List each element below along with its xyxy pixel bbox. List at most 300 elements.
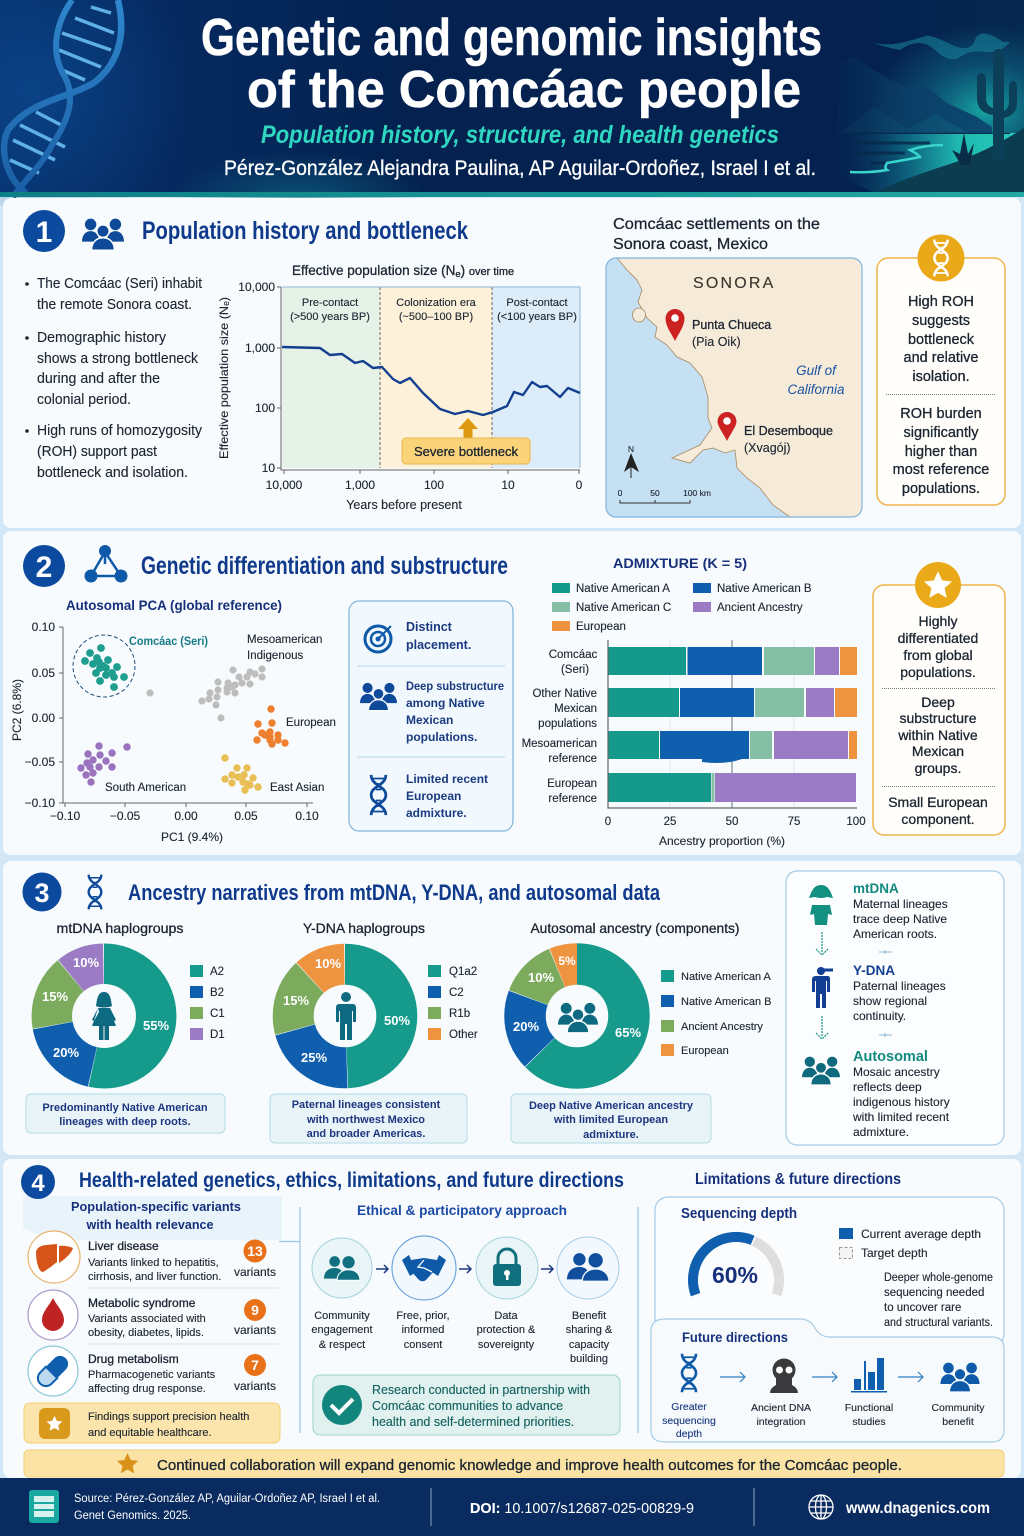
bullet list: The Comcáac (Seri) inhabit xyxy=(37,276,202,292)
legend: admixture: European xyxy=(576,621,626,633)
text: metabolic syndrome xyxy=(88,1296,206,1339)
line chart: effective population size: (<100 years BP) xyxy=(497,311,577,323)
bullet list xyxy=(25,276,203,481)
callout: partnership: health and self-determined priorities. xyxy=(372,1415,574,1429)
labels: future steps: Greater xyxy=(671,1401,707,1413)
labels: future steps: integration xyxy=(756,1416,806,1428)
panel 3: ancestry narratives: 10% xyxy=(528,970,554,985)
icon: blood drop xyxy=(28,1290,78,1340)
scatter plot: PCA: 0.05 xyxy=(234,809,258,823)
icon: people xyxy=(360,683,397,711)
caption: autosomal xyxy=(511,1094,711,1143)
text: mtDNA: mtDNA xyxy=(853,881,899,896)
stacked bar chart: admixture: populations xyxy=(538,718,597,730)
text: deeper sequencing: to uncover rare xyxy=(884,1302,961,1314)
scatter plot: PCA: Comcáac (Seri) xyxy=(129,634,208,648)
text: mtDNA xyxy=(853,881,948,941)
badge: 7 variants: variants xyxy=(234,1379,276,1393)
text: autosomal: with limited recent xyxy=(852,1110,950,1124)
callout: precision health: Findings support precision health xyxy=(88,1411,249,1423)
stacked bar chart: admixture: Comcáac xyxy=(549,649,598,661)
step: benefit sharing: sharing & xyxy=(566,1324,613,1336)
scale bar xyxy=(618,488,711,503)
text: Y-DNA: show regional xyxy=(853,994,927,1008)
panel 3: ancestry narratives: 20% xyxy=(513,1019,539,1034)
donut chart: mtDNA xyxy=(52,964,156,1068)
donut title: autosomal: Autosomal ancestry (components) xyxy=(530,920,740,936)
line chart: effective population size: Effective population size (N xyxy=(292,263,455,278)
bullet list: Demographic history xyxy=(37,330,167,346)
callout: severe bottleneck: Severe bottleneck xyxy=(414,444,519,459)
scatter plot: PCA: PC1 (9.4%) xyxy=(161,830,223,844)
text: deeper sequencing xyxy=(884,1272,993,1329)
bullet list: the remote Sonora coast. xyxy=(37,297,192,313)
heading: ethical approach: Ethical & participatory approach xyxy=(357,1202,567,1218)
line chart: effective population size: 100 xyxy=(255,401,275,415)
stacked bar chart: admixture xyxy=(522,640,866,848)
text: autosomal: Mosaic ancestry xyxy=(853,1065,940,1079)
callout card: ROH: populations. xyxy=(902,481,980,497)
section number 4: 4 xyxy=(31,1170,45,1197)
stacked bar chart: admixture: 50 xyxy=(726,816,738,828)
legend: depth: Current average depth xyxy=(861,1227,981,1241)
text: distinct placement: placement. xyxy=(406,638,471,652)
section number 1 xyxy=(23,210,65,252)
website: www.dnagenics.com xyxy=(845,1500,990,1517)
caption: Y-DNA: and broader Americas. xyxy=(307,1128,425,1140)
card: narratives xyxy=(786,871,1004,1145)
text: distinct placement xyxy=(406,620,471,652)
step: benefit sharing: capacity xyxy=(569,1339,610,1351)
legend: mtDNA: D1 xyxy=(210,1029,225,1041)
scale bar: 100 km xyxy=(683,488,711,498)
bullet list: during and after the xyxy=(37,371,160,387)
card: sequencing depth xyxy=(655,1197,1004,1347)
panel 3: ancestry narratives: 55% xyxy=(143,1018,169,1033)
donut chart: autosomal xyxy=(525,964,629,1068)
icon: DNA xyxy=(371,775,386,815)
arrow: bottleneck xyxy=(458,418,478,439)
gauge: 60 percent: 60% xyxy=(712,1262,758,1288)
text: drug metabolism: Drug metabolism xyxy=(88,1352,179,1366)
text: Y-DNA: Y-DNA xyxy=(853,963,895,978)
text: limited admixture: Limited recent xyxy=(406,772,488,786)
map heading xyxy=(613,216,820,253)
scatter plot: PCA: −0.10 xyxy=(50,809,81,823)
labels: future steps: studies xyxy=(852,1416,886,1428)
arrow: Y-DNA to autosomal xyxy=(816,1016,828,1039)
legend: depth: Target depth xyxy=(861,1246,928,1260)
labels: future steps: benefit xyxy=(942,1416,974,1428)
step: benefit sharing: building xyxy=(570,1353,608,1365)
title xyxy=(201,9,822,119)
text: deeper sequencing: Deeper whole-genome xyxy=(884,1272,993,1284)
callout card: differentiated: groups. xyxy=(915,760,961,776)
labels: future steps: sequencing xyxy=(662,1415,716,1427)
callout card: ROH: High ROH xyxy=(908,294,974,310)
bullet list: shows a strong bottleneck xyxy=(37,351,199,367)
text: limited admixture: European xyxy=(406,789,461,803)
caption: Y-DNA: with northwest Mexico xyxy=(306,1114,425,1126)
title: of the Comcáac people xyxy=(247,61,801,119)
bullet list: High runs of homozygosity xyxy=(37,423,203,439)
callout card: ROH: bottleneck xyxy=(908,332,975,348)
line chart: effective population size: Post-contact xyxy=(506,297,568,309)
callout card: ROH: most reference xyxy=(893,462,989,478)
step: data protection: protection & xyxy=(477,1324,536,1336)
subheading: variants: with health relevance xyxy=(86,1217,214,1232)
legend: admixture: Native American C xyxy=(576,602,671,614)
callout: partnership xyxy=(313,1375,620,1435)
stacked bar chart: admixture: 25 xyxy=(664,816,676,828)
text: autosomal: indigenous history xyxy=(853,1095,950,1109)
line chart: effective population size: (~500–100 BP) xyxy=(399,311,473,323)
legend: admixture: Native American B xyxy=(717,583,812,595)
gauge: 60 percent xyxy=(693,1237,779,1295)
legend: Y-DNA xyxy=(428,965,478,1041)
line chart: effective population size: over time xyxy=(469,266,514,278)
line chart: effective population size: 1,000 xyxy=(345,478,375,492)
text: deeper sequencing: sequencing needed xyxy=(884,1287,984,1299)
text: mtDNA: trace deep Native xyxy=(853,912,947,926)
banner: closing message xyxy=(24,1450,1004,1477)
line chart: effective population size: 10 xyxy=(262,461,275,475)
step: community engagement: Community xyxy=(314,1310,370,1322)
arrow xyxy=(459,1265,471,1273)
step: informed consent: Free, prior, xyxy=(396,1310,450,1322)
caption: Y-DNA: Paternal lineages consistent xyxy=(292,1099,441,1111)
card: key findings xyxy=(349,601,513,831)
line chart: effective population size: 100 xyxy=(424,478,444,492)
legend: Y-DNA: Q1a2 xyxy=(449,966,477,978)
bullet list: bottleneck and isolation. xyxy=(37,465,188,481)
icon: girl xyxy=(809,885,833,925)
callout card: ROH: suggests xyxy=(912,313,970,329)
callout card: differentiated: Mexican xyxy=(912,743,964,759)
heading 2: Genetic differentiation and substructure xyxy=(141,552,508,580)
scale bar: 0 xyxy=(618,488,623,498)
stacked bar chart: admixture: (Seri) xyxy=(561,664,589,676)
donut title: mtDNA: mtDNA haplogroups xyxy=(56,920,184,936)
callout card: differentiated: component. xyxy=(901,811,975,827)
icon: man xyxy=(336,992,356,1040)
section number 3 xyxy=(22,872,62,912)
line chart: effective population size: 1,000 xyxy=(245,341,275,355)
stacked bar chart: admixture: Mexican xyxy=(554,703,597,715)
text: liver disease: cirrhosis, and liver function. xyxy=(88,1271,221,1283)
subheading: variants xyxy=(71,1199,241,1232)
text: limited admixture: admixture. xyxy=(406,806,467,820)
scatter plot: PCA: −0.05 xyxy=(25,755,55,769)
text: drug metabolism xyxy=(88,1352,216,1395)
PCA title: Autosomal PCA (global reference) xyxy=(66,597,282,613)
text: deep substructure: Mexican xyxy=(406,713,453,727)
icon: family group xyxy=(802,1057,840,1085)
callout card: differentiated: from global xyxy=(903,647,973,663)
stacked bar chart: admixture: Mesoamerican xyxy=(522,738,597,750)
source text: Source: Pérez-González AP, Aguilar-Ordoñez AP, Israel I et al. xyxy=(74,1493,380,1505)
icon: target xyxy=(365,626,391,652)
legend: mtDNA: B2 xyxy=(210,987,224,999)
line chart: effective population size xyxy=(217,263,583,512)
source text: Genet Genomics. 2025. xyxy=(74,1510,191,1522)
stacked bar chart: admixture: 75 xyxy=(788,816,800,828)
labels: future steps: depth xyxy=(676,1428,702,1440)
scatter plot: PCA: European xyxy=(286,717,336,729)
callout: precision health: and equitable healthcare. xyxy=(88,1427,212,1439)
callout card: differentiated: Highly xyxy=(919,613,957,629)
legend: mtDNA xyxy=(190,965,225,1041)
badge: 9 variants xyxy=(234,1299,276,1337)
map: Sonora coast xyxy=(606,258,862,517)
arrow xyxy=(541,1265,553,1273)
line chart: effective population size: 10,000 xyxy=(238,280,275,294)
text: metabolic syndrome: obesity, diabetes, lipids. xyxy=(88,1327,204,1339)
heading 3: Ancestry narratives from mtDNA, Y-DNA, and autosomal data xyxy=(128,880,661,905)
label Punta Chueca: Punta Chueca xyxy=(692,318,771,332)
callout card: differentiated: Deep xyxy=(921,694,955,710)
scatter plot: PCA: 0.00 xyxy=(32,711,55,725)
callout card: differentiated: differentiated xyxy=(898,630,978,646)
legend: Y-DNA: Other xyxy=(449,1029,478,1041)
map heading: Sonora coast, Mexico xyxy=(613,236,768,253)
badge: 7 variants: 7 xyxy=(251,1357,259,1373)
footer xyxy=(0,1478,1024,1536)
icon: paper xyxy=(29,1490,59,1523)
text: liver disease xyxy=(88,1239,221,1283)
badge: 9 variants: 9 xyxy=(251,1302,259,1318)
icon: globe xyxy=(809,1495,833,1519)
line chart: effective population size: Pre-contact xyxy=(302,297,358,309)
panel 3: ancestry narratives: 20% xyxy=(53,1045,79,1060)
arrow xyxy=(898,1372,923,1382)
scatter plot: PCA: 0.05 xyxy=(32,666,55,680)
scatter plot: PCA xyxy=(10,620,336,844)
callout: precision health xyxy=(24,1403,280,1443)
legend: admixture: Native American A xyxy=(576,583,670,595)
text: distinct placement: Distinct xyxy=(406,620,453,634)
callout: partnership: Comcáac communities to advance xyxy=(372,1399,563,1413)
scatter plot: PCA: −0.05 xyxy=(110,809,141,823)
label Punta Chueca xyxy=(692,318,771,349)
caption: mtDNA xyxy=(26,1094,225,1133)
text: deeper sequencing: and structural variants. xyxy=(884,1317,993,1329)
icon: man xyxy=(812,967,833,1008)
label El Desemboque xyxy=(744,424,833,455)
callout card: differentiated: Small European xyxy=(888,794,988,810)
scatter plot: PCA: Indigenous xyxy=(247,650,304,662)
labels: future steps xyxy=(662,1401,985,1440)
north arrow xyxy=(624,444,639,478)
callout card: differentiated: populations. xyxy=(900,664,976,680)
text: mtDNA: Maternal lineages xyxy=(853,897,948,911)
donut chart: Y-DNA xyxy=(293,964,397,1068)
callout card: ROH: and relative xyxy=(904,350,978,366)
step: data protection xyxy=(476,1237,538,1351)
callout card: differentiated: substructure xyxy=(899,710,977,726)
callout card: ROH: isolation. xyxy=(912,369,970,385)
arrow: mtDNA to Y-DNA xyxy=(816,932,828,955)
card: sequencing depth: Sequencing depth xyxy=(681,1206,797,1222)
panel 3: ancestry narratives: 25% xyxy=(301,1050,327,1065)
icon: DNA xyxy=(682,1354,696,1392)
subheading: variants: Population-specific variants xyxy=(71,1199,241,1214)
callout card: ROH xyxy=(877,234,1005,505)
scatter plot: PCA: 0.00 xyxy=(174,809,198,823)
badge: 13 variants xyxy=(234,1240,276,1279)
scatter plot: PCA: Mesoamerican xyxy=(247,634,322,646)
icon: map pin Punta Chueca xyxy=(666,309,684,341)
legend: admixture xyxy=(552,583,812,633)
text: drug metabolism: affecting drug response. xyxy=(88,1383,206,1395)
badge: 13 variants: variants xyxy=(234,1265,276,1279)
badge: 9 variants: variants xyxy=(234,1323,276,1337)
stacked bar chart: admixture: 100 xyxy=(846,816,866,828)
heading 4: Health-related genetics, ethics, limitations, and future directions xyxy=(79,1169,624,1192)
label Gulf of California: California xyxy=(787,382,845,397)
heading 1: Population history and bottleneck xyxy=(142,217,468,245)
text: metabolic syndrome: Variants associated with xyxy=(88,1313,206,1325)
text: Y-DNA: Paternal lineages xyxy=(853,979,946,993)
legend: autosomal: Ancient Ancestry xyxy=(681,1021,763,1033)
icon: skull xyxy=(770,1358,798,1393)
text: Y-DNA xyxy=(853,963,946,1023)
step: informed consent: informed xyxy=(402,1324,444,1336)
authors: Pérez-González Alejandra Paulina, AP Aguilar-Ordoñez, Israel I et al. xyxy=(224,157,816,180)
stacked bar chart: admixture: reference xyxy=(548,753,597,765)
callout card: ROH: ROH burden xyxy=(900,406,982,422)
badge: 13 variants: 13 xyxy=(247,1243,263,1259)
north arrow: N xyxy=(628,444,634,454)
step: informed consent xyxy=(392,1236,456,1351)
callout card: differentiated: within Native xyxy=(897,727,978,743)
scatter plot: PCA: 0.10 xyxy=(295,809,319,823)
icon: molecule xyxy=(84,545,128,582)
section number 2: 2 xyxy=(36,551,52,584)
panel 3: ancestry narratives: 65% xyxy=(615,1025,641,1040)
callout card: ROH: higher than xyxy=(905,444,977,460)
text: deep substructure: Deep substructure xyxy=(406,679,504,693)
text: autosomal xyxy=(852,1049,950,1139)
stacked bar chart: admixture: Ancestry proportion (%) xyxy=(659,834,785,848)
caption: autosomal: Deep Native American ancestry xyxy=(529,1100,694,1112)
label El Desemboque: El Desemboque xyxy=(744,424,833,438)
badge: 7 variants xyxy=(234,1354,276,1393)
label Gulf of California xyxy=(787,363,845,397)
map heading: Comcáac settlements on the xyxy=(613,216,820,233)
panel 2: differentiation xyxy=(3,531,1021,855)
text: metabolic syndrome: Metabolic syndrome xyxy=(88,1296,196,1310)
labels: future steps: Ancient DNA xyxy=(751,1402,811,1414)
text: Y-DNA: continuity. xyxy=(853,1009,906,1023)
legend: autosomal xyxy=(661,970,772,1057)
scatter plot: PCA: South American xyxy=(105,782,186,794)
legend: Y-DNA: C2 xyxy=(449,987,464,999)
section number 3: 3 xyxy=(34,878,50,908)
panel 3: ancestry narratives: 10% xyxy=(73,955,99,970)
stacked bar chart: admixture: 0 xyxy=(605,816,611,828)
legend: Y-DNA: R1b xyxy=(449,1008,470,1020)
line chart: effective population size: 0 xyxy=(576,478,583,492)
legend: autosomal: Native American A xyxy=(681,971,772,983)
caption: mtDNA: lineages with deep roots. xyxy=(59,1116,191,1128)
legend: autosomal: European xyxy=(681,1045,729,1057)
text: liver disease: Variants linked to hepatitis, xyxy=(88,1257,219,1269)
stacked bar chart: admixture: Other Native xyxy=(532,688,597,700)
caption: autosomal: with limited European xyxy=(553,1114,668,1126)
panel 3: ancestry narratives: 50% xyxy=(384,1013,410,1028)
text: deep substructure: populations. xyxy=(406,730,477,744)
scatter plot: PCA: 0.10 xyxy=(32,620,55,634)
caption: autosomal: admixture. xyxy=(583,1129,639,1141)
scatter plot: PCA: East Asian xyxy=(270,782,324,794)
bullet list: colonial period. xyxy=(37,392,131,408)
text: autosomal: reflects deep xyxy=(853,1080,922,1094)
DNA helix illustration xyxy=(4,0,121,197)
legend: mtDNA: A2 xyxy=(210,966,224,978)
callout: partnership: Research conducted in partnership with xyxy=(372,1383,590,1397)
panel 3: ancestry narratives xyxy=(3,861,1021,1155)
map: Sonora coast: SONORA xyxy=(693,275,776,292)
text: mtDNA: American roots. xyxy=(853,927,937,941)
panel 3: ancestry narratives: 5% xyxy=(558,954,576,968)
line chart: effective population size: 10 xyxy=(501,478,515,492)
arrow xyxy=(720,1372,745,1382)
DOI: DOI: 10.1007/s12687-025-00829-9 xyxy=(470,1500,694,1517)
icon: woman xyxy=(92,992,116,1040)
card: future directions: Future directions xyxy=(682,1330,788,1345)
line chart: effective population size: 10,000 xyxy=(266,478,303,492)
legend: depth xyxy=(839,1227,981,1260)
icon: group xyxy=(558,1003,598,1033)
label Gulf of California: Gulf of xyxy=(796,363,837,378)
text: deep substructure: among Native xyxy=(406,696,485,710)
ADMIXTURE title: ADMIXTURE (K = 5) xyxy=(613,555,747,571)
line chart: effective population size: e xyxy=(455,269,461,280)
header banner xyxy=(0,0,1024,250)
arrow xyxy=(812,1372,837,1382)
heading: limitations: Limitations & future directions xyxy=(695,1171,901,1188)
icon: community xyxy=(940,1363,980,1392)
line chart: effective population size: Colonization era xyxy=(396,297,477,309)
section number 2 xyxy=(23,545,65,587)
legend: autosomal: Native American B xyxy=(681,996,771,1008)
section number 4 xyxy=(21,1165,55,1199)
stacked bar chart: admixture: reference xyxy=(548,793,597,805)
line chart: effective population size: Effective population size (Nₑ) xyxy=(217,297,231,459)
label El Desemboque: (Xvagój) xyxy=(744,441,791,455)
text: limited admixture xyxy=(406,772,488,820)
stacked bar chart: admixture: European xyxy=(547,778,597,790)
panel 3: ancestry narratives: 10% xyxy=(315,956,341,971)
landscape illustration xyxy=(835,25,1024,195)
icon: people xyxy=(82,219,124,250)
text: drug metabolism: Pharmacogenetic variants xyxy=(88,1369,216,1381)
step: benefit sharing xyxy=(557,1237,619,1365)
subtitle: Population history, structure, and health genetics xyxy=(261,121,779,149)
line chart: effective population size: (>500 years BP) xyxy=(290,311,370,323)
text: liver disease: Liver disease xyxy=(88,1239,159,1253)
text: deep substructure xyxy=(406,679,504,744)
line chart: effective population size: Years before present xyxy=(346,498,462,512)
callout: severe bottleneck xyxy=(402,438,530,464)
step: community engagement xyxy=(311,1238,373,1351)
donut title: Y-DNA: Y-DNA haplogroups xyxy=(303,920,425,936)
callout card: ROH: significantly xyxy=(904,425,979,441)
icon: DNA heading xyxy=(89,875,101,909)
banner: closing message: Continued collaboration will expand genomic knowledge and improve health outcomes for the Comcáac people. xyxy=(157,1458,902,1474)
icon: bar chart xyxy=(851,1358,887,1392)
